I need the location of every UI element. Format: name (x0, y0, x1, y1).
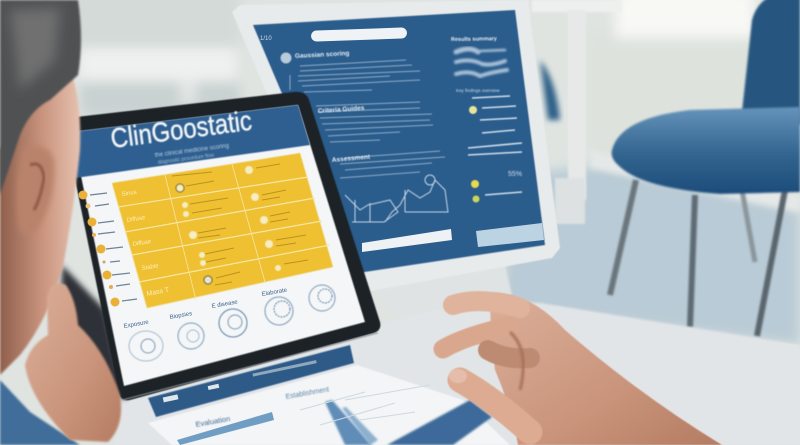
report chart (325, 400, 372, 445)
blue office chair (540, 0, 800, 336)
tablet diagram labels: E disease (211, 299, 239, 310)
monitor screen (253, 10, 545, 273)
left hand (25, 283, 121, 442)
tablet subtitle: the clinical medicine scoring (154, 143, 229, 159)
tablet title: ClinGoostatic (109, 105, 254, 154)
ring finger (488, 350, 530, 358)
tablet bezel (67, 92, 380, 400)
tablet left icon list (78, 190, 137, 306)
monitor right list with dots: Key findings overview (456, 88, 500, 93)
blue shirt (0, 380, 80, 445)
left hand holding tablet, behind device (60, 265, 125, 400)
tablet diagram labels: Elaborate (261, 287, 288, 298)
tablet yellow table (112, 153, 333, 308)
monitor text block: first section (280, 52, 445, 178)
yellow row labels: Stable (141, 263, 160, 272)
tablet diagram labels (123, 287, 288, 330)
monitor headings (295, 36, 498, 164)
tablet stand / folder (148, 345, 354, 417)
tablet white screen (72, 105, 365, 386)
foreground desk (115, 300, 800, 445)
yellow row labels: Diffuse (132, 239, 152, 248)
tablet diagram labels: Exposure (123, 320, 150, 330)
palm and arm (490, 292, 722, 445)
report heading: Establishment (285, 386, 330, 401)
monitor frame (232, 0, 560, 292)
tablet bottom edge highlight (122, 333, 378, 400)
tablet diagram labels: Biopsies (169, 311, 193, 321)
yellow row labels (121, 190, 170, 298)
report subheading: Evaluation (195, 414, 231, 429)
yellow row labels: Diffuse (126, 215, 146, 224)
tablet bottom diagrams (129, 285, 335, 361)
monitor bottom buttons (362, 223, 544, 252)
monitor search pill (311, 27, 407, 42)
face (0, 70, 80, 375)
monitor waveform chart (345, 175, 448, 222)
tablet blue header (72, 105, 310, 178)
ear (16, 146, 54, 234)
monitor right list with dots: 55% (508, 171, 522, 178)
monitor right list with dots (456, 88, 522, 202)
yellow cell icons (176, 166, 281, 284)
monitor (232, 0, 560, 318)
monitor headings: Criteria Guides (318, 105, 365, 115)
middle finger (443, 326, 510, 349)
monitor status label: 1/10 (260, 36, 272, 42)
report table header (177, 412, 274, 445)
tablet: diagnostic procedure flow (157, 153, 215, 166)
thumb (460, 380, 530, 432)
yellow row labels: Sinus (121, 190, 137, 198)
tablet (67, 92, 380, 400)
yellow row labels: Mass T (146, 287, 170, 298)
yellow cell text lines (172, 164, 308, 285)
report dark band (387, 400, 492, 445)
index finger (453, 301, 520, 308)
monitor headings: Assessment (332, 154, 371, 164)
monitor right wave illustrations (456, 49, 507, 76)
right hand (443, 292, 722, 445)
monitor stand (370, 265, 512, 318)
paper report (148, 365, 510, 445)
person's head (0, 0, 81, 375)
monitor headings: Gaussian scoring (295, 50, 350, 60)
monitor headings: Results summary (451, 36, 498, 43)
hair (0, 0, 81, 195)
